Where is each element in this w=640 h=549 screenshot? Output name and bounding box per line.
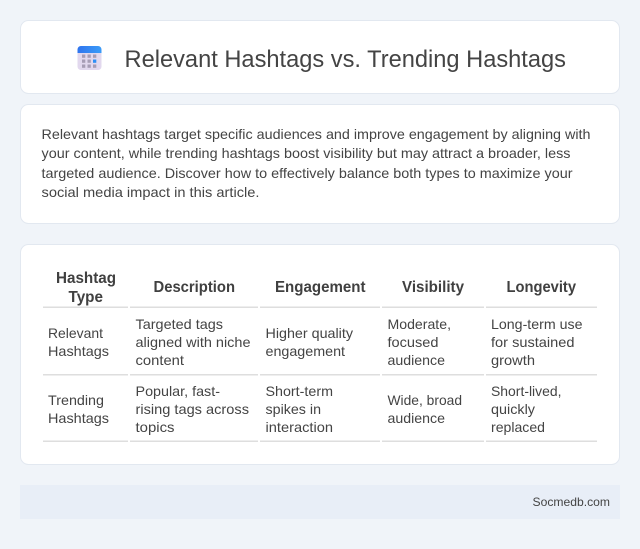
table row: trending hashtags: Short-lived, (491, 383, 562, 399)
table row: relevant hashtags (48, 316, 583, 368)
table row: relevant hashtags: aligned with niche (136, 334, 251, 350)
table row: relevant hashtags: focused (388, 334, 438, 350)
table row: trending hashtags: audience (388, 410, 445, 426)
table row: trending hashtags: interaction (266, 419, 333, 435)
title: Relevant Hashtags vs. Trending Hashtags (124, 46, 566, 73)
text block: intro: Relevant hashtags target specific audiences and improve engagement by aligning with (42, 126, 590, 142)
panel: comparison table (20, 244, 620, 464)
text block: intro: social media impact in this article. (42, 184, 260, 200)
text block: intro: your content, while trending hashtags boost visibility but may attract a broader, less (42, 145, 570, 161)
table row: relevant hashtags: audience (388, 352, 445, 368)
panel: intro paragraph (20, 104, 620, 224)
table row: relevant hashtags: Relevant (48, 325, 103, 341)
table row: relevant hashtags: Hashtags (48, 343, 109, 359)
footer source text: Socmedb.com (532, 495, 610, 509)
table row: trending hashtags: Wide, broad (388, 392, 462, 408)
panel: title header (20, 20, 620, 94)
table header row (56, 270, 576, 306)
table row: trending hashtags (48, 383, 562, 435)
table row: trending hashtags: replaced (491, 419, 545, 435)
table row: trending hashtags: spikes in (266, 401, 321, 417)
table row: relevant hashtags: Targeted tags (136, 316, 223, 332)
footer bar (20, 485, 620, 519)
table header row: Hashtag (56, 270, 116, 287)
table header row: Type (68, 289, 103, 306)
table row: relevant hashtags: content (136, 352, 184, 368)
table row: relevant hashtags: Moderate, (388, 316, 451, 332)
table row: trending hashtags: Trending (48, 392, 104, 408)
text block: intro: targeted audience. Discover how to effectively balance both types to maximize your (42, 165, 573, 181)
text block: intro (42, 126, 590, 200)
table row: trending hashtags: quickly (491, 401, 535, 417)
table row: trending hashtags: Short-term (266, 383, 333, 399)
table row: trending hashtags: Popular, fast- (136, 383, 220, 399)
table row: trending hashtags: Hashtags (48, 410, 109, 426)
table row: trending hashtags: topics (136, 419, 174, 435)
table header row: Engagement (275, 279, 366, 296)
table row: relevant hashtags: Higher quality (266, 325, 353, 341)
table header row: Longevity (506, 279, 576, 296)
table row: relevant hashtags: engagement (266, 343, 345, 359)
table row: relevant hashtags: for sustained (491, 334, 574, 350)
table row: relevant hashtags: growth (491, 352, 535, 368)
icon: calendar (78, 46, 102, 70)
table row: relevant hashtags: Long-term use (491, 316, 583, 332)
table header row: Visibility (402, 279, 464, 296)
table header row: Description (154, 279, 235, 296)
table row: trending hashtags: rising tags across (136, 401, 249, 417)
